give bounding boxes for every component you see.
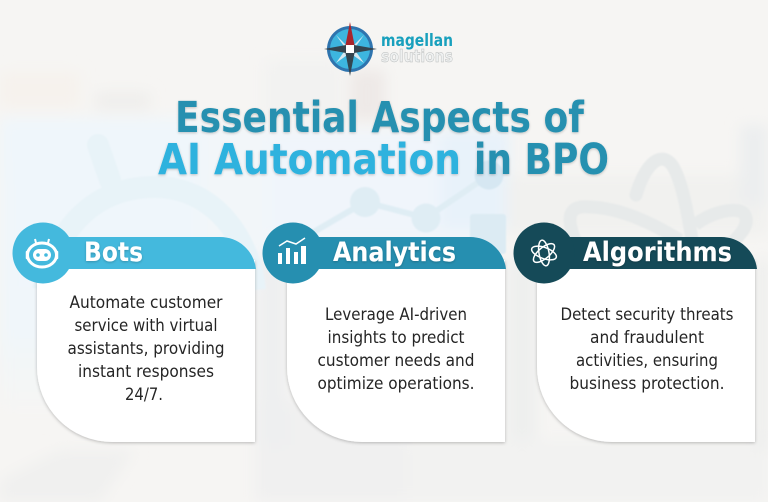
body text: activities, ensuring [576,351,718,370]
card header [300,237,506,269]
body text: Automate customer [70,293,223,312]
body text: insights to predict [328,328,465,347]
body text: customer needs and [318,351,474,370]
body text: 24/7. [125,385,163,404]
heading: Bots [84,237,143,268]
icon badge: robot [12,222,74,284]
card body [287,260,505,442]
body text [318,305,474,393]
title: Essential Aspects of [175,93,585,143]
panel: Bots [12,222,256,442]
body text: optimize operations. [318,374,474,393]
panel: Algorithms [514,222,757,442]
body text [68,293,224,404]
icon: compass [324,22,377,76]
icon badge: atom [514,222,574,284]
logo: Magellan Solutions [324,22,453,76]
heading: Analytics [333,237,456,268]
body text: Leverage AI-driven [325,305,467,324]
title: AI Automation [158,135,461,185]
body text [560,305,734,393]
icon badge: chart [262,222,324,284]
body text: instant responses [78,362,214,381]
card header [50,237,256,269]
body text: Detect security threats [560,305,734,324]
body text: business protection. [570,374,724,393]
heading: Algorithms [583,237,732,268]
title [158,93,609,185]
logo wordmark: magellan [381,31,453,51]
body text: assistants, providing [68,339,224,358]
body text: service with virtual [74,316,218,335]
card body [537,260,755,442]
title: in BPO [474,135,609,185]
body text: and fraudulent [590,328,704,347]
card header [550,237,757,269]
panel: Analytics [262,222,506,442]
logo tagline: solutions [381,47,453,67]
card body [37,260,255,442]
